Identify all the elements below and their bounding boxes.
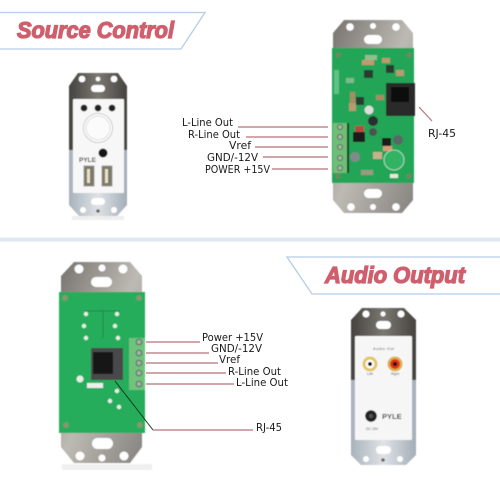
aux jack: [98, 148, 108, 158]
mounting plate bottom: [351, 380, 416, 465]
terminal block: [333, 123, 347, 173]
callout: GND/-12V: GND/-12V: [211, 342, 262, 355]
callout: POWER +15V: POWER +15V: [205, 163, 270, 176]
USB ports: [84, 166, 94, 186]
callout: RJ-45 top: RJ-45: [428, 127, 456, 140]
callout: Vref: [146, 353, 241, 366]
panel: audio output heading: [287, 257, 500, 294]
right RCA jack: [388, 356, 402, 372]
callout: RJ-45 top: [419, 107, 456, 140]
white face: [355, 336, 412, 440]
callout: Vref: [229, 139, 328, 152]
device: audio output front plate: [351, 308, 416, 465]
left RCA jack: [362, 356, 378, 372]
callout: Power +15V: [146, 331, 263, 344]
PYLE logo: PYLE: [79, 157, 97, 164]
callout: POWER +15V: [205, 163, 328, 176]
panel divider band: [0, 238, 500, 242]
callout: R-Line Out: [188, 128, 328, 141]
callouts: back board terminals: [146, 331, 289, 389]
mounting plate top: [351, 308, 416, 380]
heading banner shape: [0, 12, 205, 49]
device: back circuit board: [59, 262, 152, 470]
callout: R-Line Out: R-Line Out: [228, 365, 282, 378]
callout: RJ-45 bottom: RJ-45: [256, 421, 282, 434]
mounting plate: [333, 20, 413, 213]
callout: GND/-12V: [146, 342, 262, 355]
mounting plate top: [69, 73, 127, 150]
device: audio output front plate: Right: [391, 372, 399, 376]
heading: Source Control: Source Control: [17, 17, 175, 43]
callout: L-Line Out: L-Line Out: [182, 116, 234, 129]
device reflection: [72, 216, 124, 220]
RJ-45 socket: [91, 348, 123, 380]
device: audio output front plate: DC 15V: [366, 427, 379, 431]
device reflection: [62, 464, 152, 470]
terminal block: [129, 338, 145, 390]
mounting plate: [61, 262, 142, 463]
callout: RJ-45 bottom: [115, 381, 282, 434]
jack labels: Left: [367, 372, 373, 376]
callout: R-Line Out: [146, 365, 282, 378]
device: source control front plate: [69, 73, 127, 220]
screw holes: [336, 53, 411, 178]
callout: R-Line Out: R-Line Out: [188, 128, 241, 141]
callout: GND/-12V: [207, 151, 328, 164]
label sticker: [87, 383, 103, 388]
callout: GND/-12V: GND/-12V: [207, 151, 258, 164]
PCB traces and holes: [76, 312, 121, 409]
PYLE logo: PYLE: [382, 412, 402, 421]
green PCB: [59, 292, 145, 433]
callout: Vref: Vref: [229, 139, 252, 152]
mounting plate bottom: [69, 150, 127, 216]
heading banner shape: [287, 257, 500, 294]
RJ-45 socket: [386, 83, 415, 116]
buttons: [81, 105, 115, 111]
components: [334, 55, 404, 178]
DC jack: [365, 410, 377, 422]
white face: [73, 99, 124, 193]
screw holes: [62, 295, 143, 428]
device: source control circuit board: [332, 20, 415, 213]
callout: L-Line Out: L-Line Out: [236, 376, 289, 389]
Audio Out label: Audio Out: [373, 346, 395, 351]
callouts: source control terminals: [182, 116, 328, 176]
volume knob: [84, 114, 112, 142]
callout: Power +15V: Power +15V: [202, 331, 263, 344]
panel: source control heading: [0, 12, 205, 49]
heading: Audio Output: Audio Output: [324, 262, 466, 288]
callout: Vref: Vref: [219, 353, 241, 366]
green PCB: [332, 48, 414, 183]
